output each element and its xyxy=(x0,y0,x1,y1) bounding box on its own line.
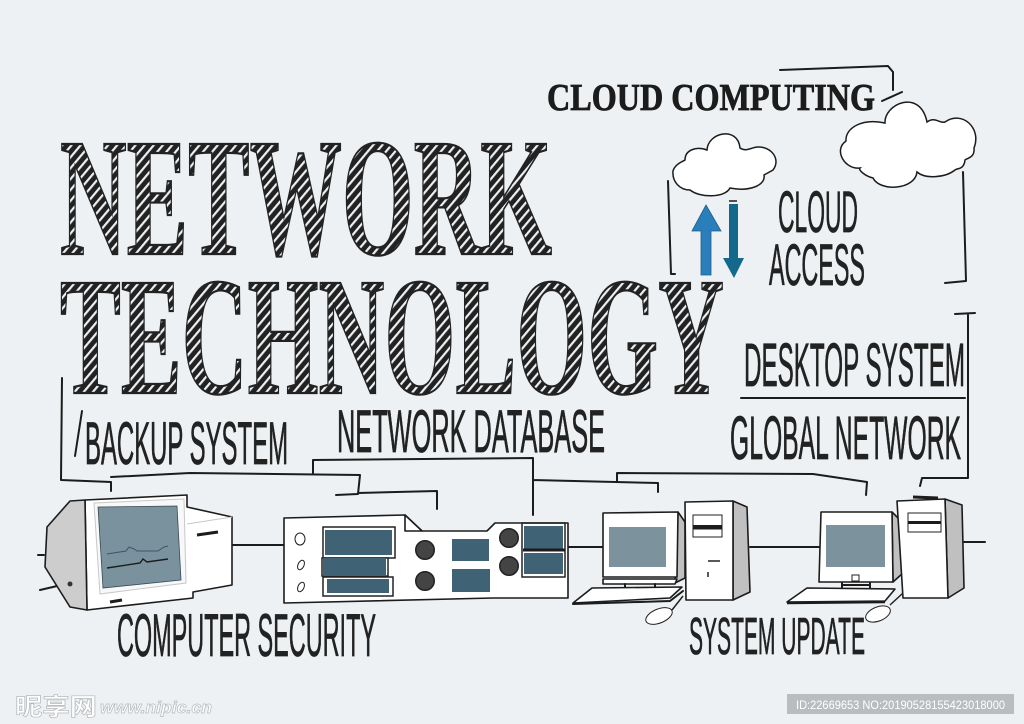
watermark logo: 昵享网 xyxy=(15,694,97,721)
watermark id box: ID:22669653 NO:20190528155423018000 xyxy=(796,698,1005,712)
watermark logo: www.nipic.cn xyxy=(100,698,212,717)
heading: cloud computing: CLOUD COMPUTING xyxy=(547,77,875,119)
knobs xyxy=(416,530,518,590)
icon: large cloud xyxy=(840,102,976,187)
watermark logo xyxy=(15,694,212,721)
label: backup system xyxy=(75,410,288,477)
monitor screen with chart lines xyxy=(98,506,181,588)
icon: crt monitor xyxy=(45,495,232,610)
drive bays xyxy=(322,527,395,596)
indicator ovals xyxy=(295,533,306,593)
icon: teal down arrow xyxy=(723,201,744,278)
text: ACCESS xyxy=(769,233,865,298)
icon: server rack panel xyxy=(284,515,568,603)
text: BACKUP SYSTEM xyxy=(85,410,288,477)
icon: desktop computer 1 xyxy=(573,501,750,628)
icon: small cloud xyxy=(673,134,776,196)
text: COMPUTER SECURITY xyxy=(117,602,376,669)
icon: desktop computer 2 xyxy=(787,497,964,625)
title: network technology xyxy=(60,105,724,430)
text: CLOUD xyxy=(778,180,858,245)
watermark id box xyxy=(787,694,1014,714)
connector lines xyxy=(38,66,985,590)
title line: NETWORK: NETWORK xyxy=(60,105,552,291)
text: NETWORK DATABASE xyxy=(337,398,605,465)
icon: blue up arrow xyxy=(692,205,721,275)
label: cloud access xyxy=(769,180,865,298)
